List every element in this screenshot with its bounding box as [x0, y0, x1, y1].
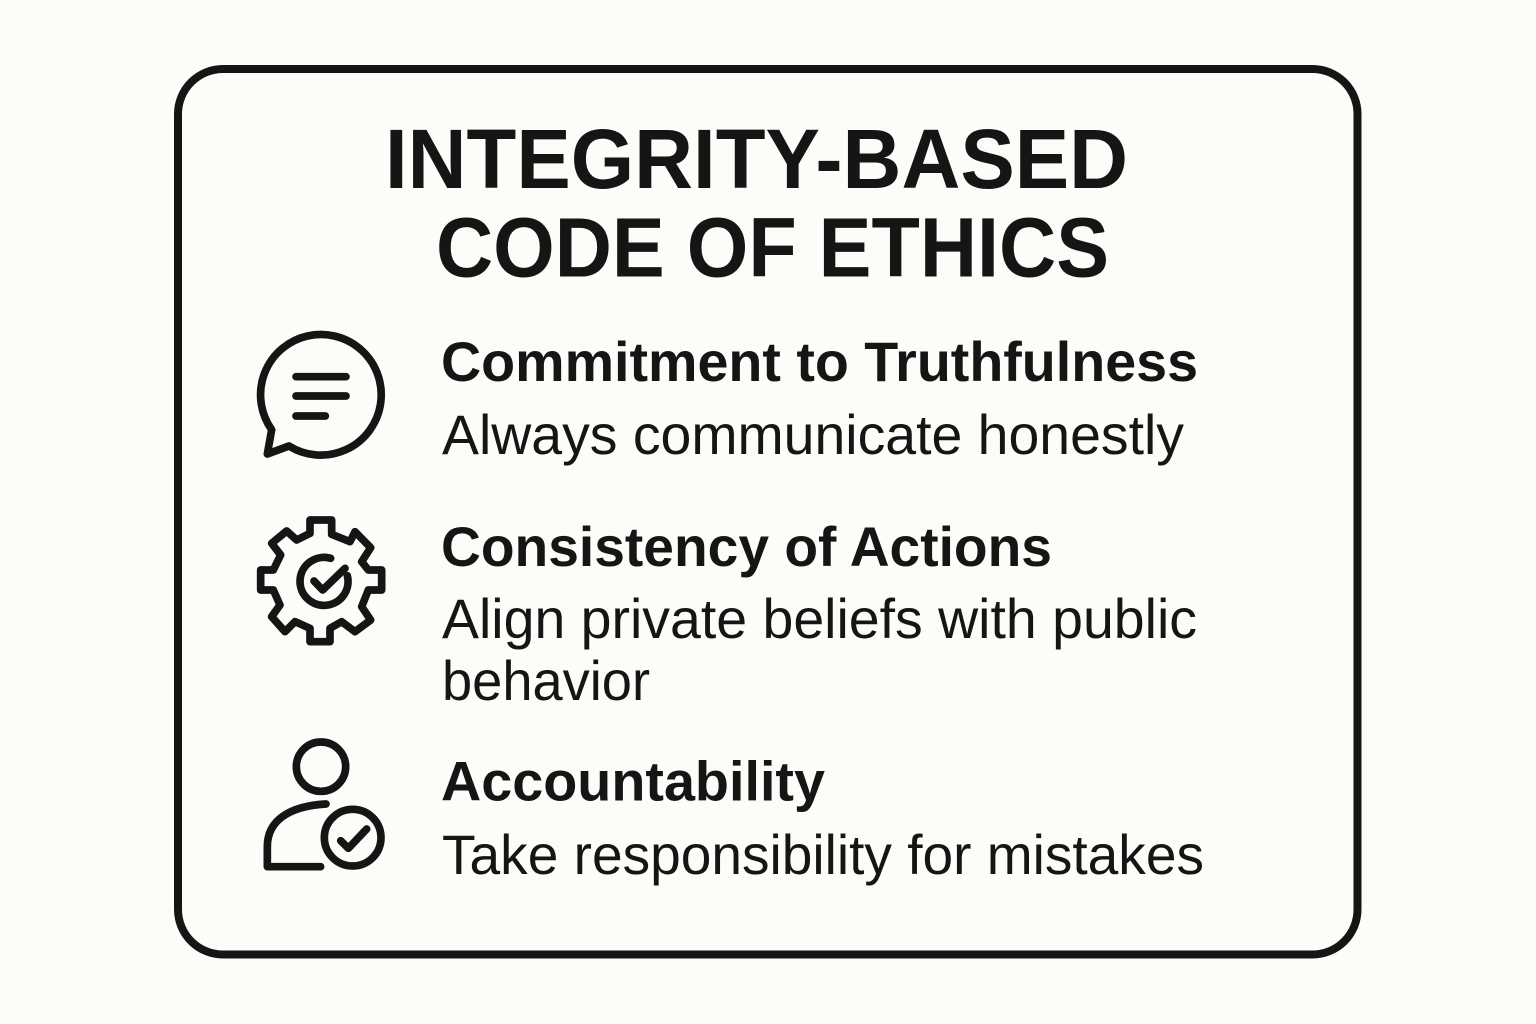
heading: accountability: Accountability	[441, 750, 825, 812]
icon: speech bubble	[261, 334, 381, 455]
text: align private beliefs with public behavior: behavior	[442, 649, 650, 712]
title: INTEGRITY-BASED	[385, 112, 1128, 206]
title	[385, 112, 1128, 294]
panel: rounded frame	[178, 69, 1358, 954]
text: always communicate honestly: Always communicate honestly	[442, 403, 1184, 466]
text: align private beliefs with public behavior	[442, 587, 1197, 712]
heading: consistency of actions: Consistency of Actions	[441, 515, 1052, 578]
icon: gear with check mark	[261, 520, 382, 642]
title: CODE OF ETHICS	[436, 200, 1109, 294]
heading: commitment to truthfulness: Commitment to Truthfulness	[441, 330, 1198, 393]
text: align private beliefs with public behavior: Align private beliefs with public	[442, 587, 1197, 650]
icon: person with check badge	[267, 742, 381, 867]
text: take responsibility for mistakes: Take responsibility for mistakes	[442, 823, 1204, 886]
